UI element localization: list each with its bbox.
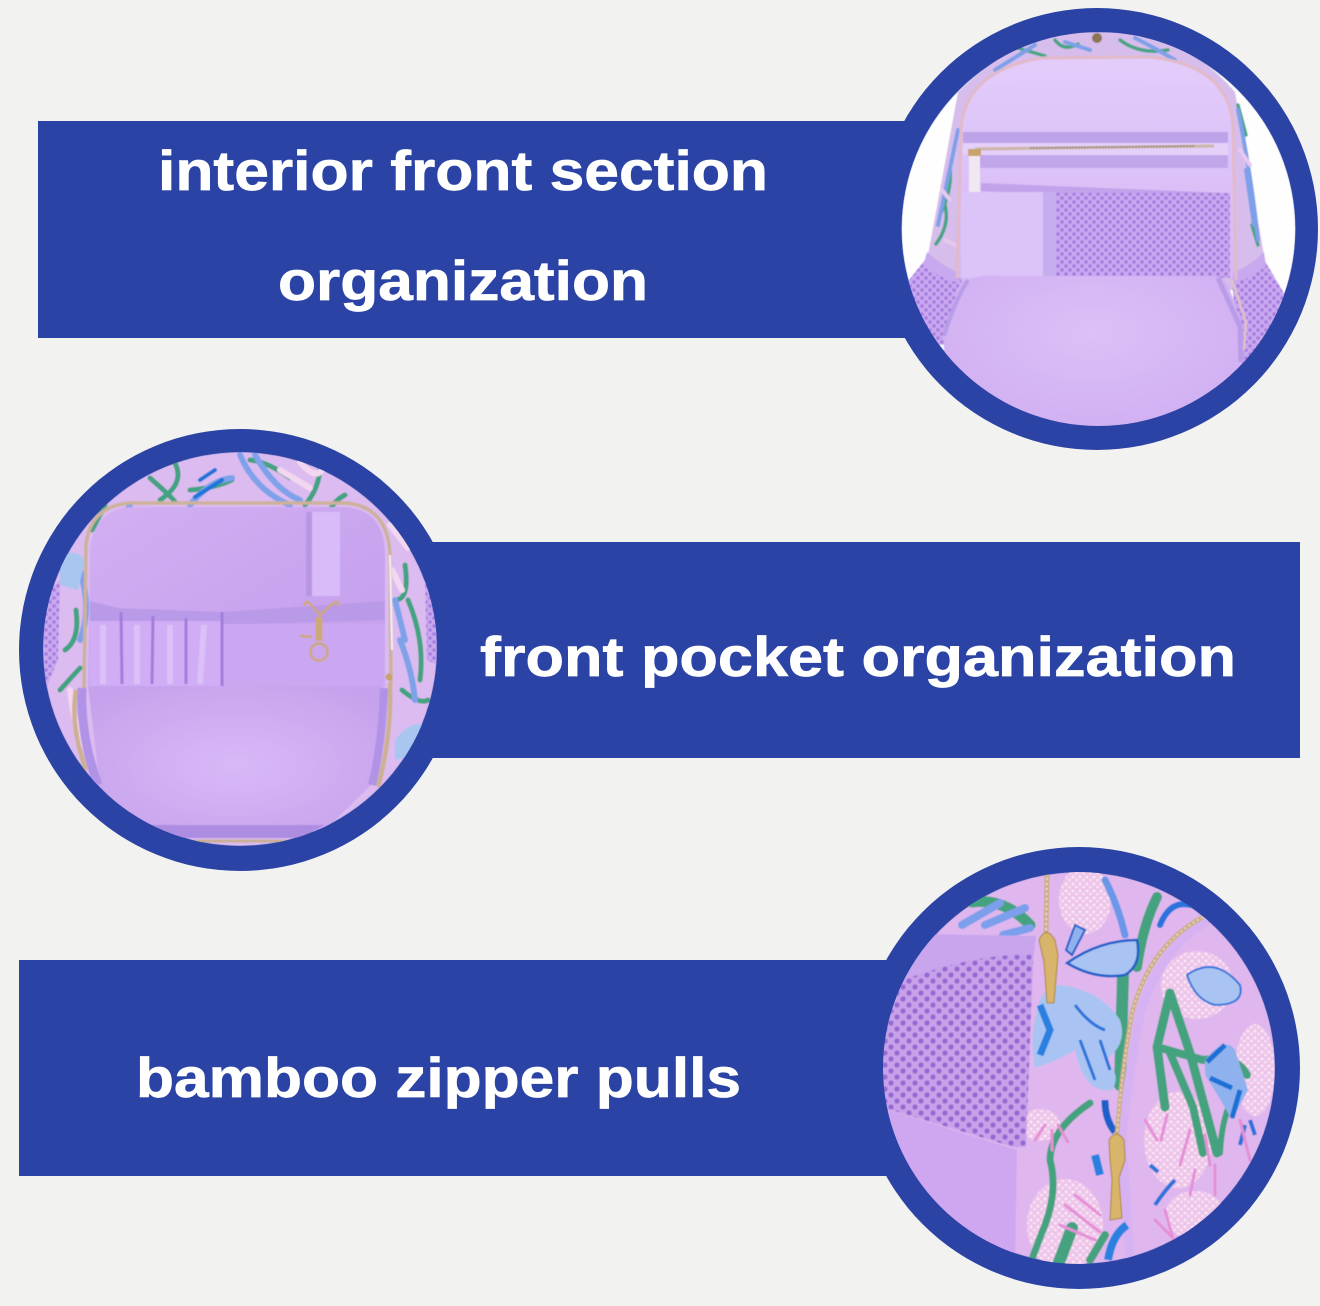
- bottom band and zipper: [135, 825, 325, 838]
- backpack printed outer shell: [928, 32, 1264, 290]
- circular frame: interior front section: [876, 8, 1318, 450]
- right slip pocket: [224, 624, 230, 625]
- side mesh pockets: [908, 260, 962, 346]
- pocket top band: [980, 183, 1220, 194]
- zipper pull: [968, 156, 980, 192]
- banner: interior front section: [38, 121, 938, 338]
- zipper around the opening: [957, 57, 1236, 280]
- heading: front pocket organization: front pocket organization: [480, 625, 1236, 688]
- heading: interior front section organization: interior front section: [158, 139, 768, 202]
- gold zipper: [975, 146, 1214, 149]
- interior back panel: [957, 57, 1233, 278]
- mesh side pockets: [43, 580, 60, 690]
- circular frame: bamboo zipper pulls: [858, 847, 1300, 1289]
- second zipper with piping: [1122, 920, 1208, 1260]
- backpack top zipper pull: [1092, 33, 1102, 43]
- mesh pocket band: [908, 934, 1036, 977]
- green stems: [972, 897, 1247, 1265]
- photo: backpack interior front section: [895, 32, 1296, 440]
- blue leaves top left: [962, 880, 1190, 935]
- interior base: [943, 276, 1243, 440]
- second bamboo zipper pull: [1109, 1134, 1125, 1220]
- panel: bamboo zipper pulls: [19, 847, 1300, 1289]
- pink flowers: [1035, 1115, 1250, 1240]
- mesh pocket: [1045, 193, 1230, 278]
- strap: [312, 512, 340, 596]
- pink speckled clusters: [1020, 866, 1275, 1271]
- slip pocket: [961, 192, 1045, 278]
- lower pouch: [88, 686, 382, 830]
- gold zipper around opening: [84, 503, 391, 690]
- first zipper: [1046, 873, 1047, 935]
- heading: interior front section organization: [158, 139, 768, 312]
- floral print outer shell: [60, 455, 428, 760]
- heading: bamboo zipper pulls: bamboo zipper pulls: [136, 1046, 741, 1109]
- banner: bamboo zipper pulls: [19, 960, 919, 1176]
- panel: interior front section organization: [38, 8, 1318, 450]
- large blue iris leaves: [1032, 925, 1255, 1205]
- first bamboo zipper pull: [1039, 932, 1058, 1003]
- organizer strips: [963, 132, 1228, 143]
- panel: front pocket organization: [19, 429, 1300, 871]
- pouch side zippers: [74, 690, 86, 770]
- interior back panel: [88, 507, 385, 687]
- heading: interior front section organization: organization: [278, 249, 648, 312]
- circular frame: front pocket: [19, 429, 461, 871]
- solid lilac base: [887, 1109, 1017, 1254]
- photo: backpack side with zipper pulls: [870, 866, 1275, 1275]
- blue leaf accents: [1095, 1155, 1127, 1260]
- banner: front pocket organization: [400, 542, 1300, 758]
- mesh pocket: [883, 954, 1034, 1148]
- pen slots: [90, 612, 222, 686]
- gold carabiner clip: [300, 602, 339, 660]
- organizer band: [90, 601, 385, 625]
- photo: backpack front pocket: [43, 452, 437, 846]
